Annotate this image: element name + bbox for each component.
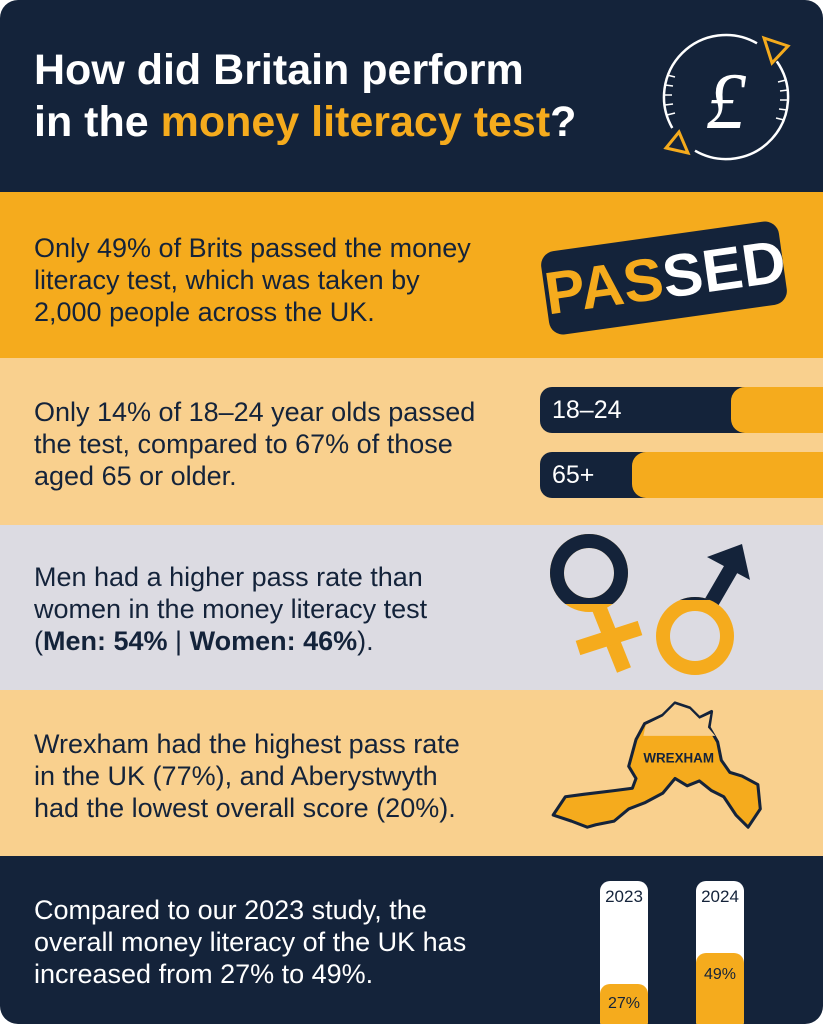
panel: age: [0, 358, 823, 525]
text: age comparison: Only 14% of 18–24 year olds passed: [34, 397, 475, 427]
icon: map: [552, 701, 762, 829]
text: Wrexham: in the UK (77%), and Aberystwyth: [34, 761, 438, 791]
chart: 2023 bar: [600, 881, 648, 1024]
text: Wrexham: had the lowest overall score (20%).: [34, 793, 456, 823]
icon: pound dial: [662, 34, 791, 160]
chart: 2024 bar: 49%: [704, 966, 736, 983]
title: in the money literacy test?: [34, 98, 576, 146]
bar: 18-24: 18–24: [552, 396, 622, 424]
text: comparison: Compared to our 2023 study, the: [34, 895, 427, 925]
chart: 2024 bar: 2024: [701, 887, 739, 906]
panel: year comparison: [0, 856, 823, 1024]
icon: PASSED stamp: PASSED: [540, 227, 790, 327]
bar: 65+: [540, 452, 823, 498]
text: age comparison: the test, compared to 67% of those: [34, 429, 453, 459]
text: age comparison: aged 65 or older.: [34, 461, 237, 491]
text: Wrexham: Wrexham had the highest pass rate: [34, 729, 460, 759]
text: comparison: [34, 895, 466, 989]
icon: gender symbols: [550, 534, 750, 675]
text: 49% passed: 2,000 people across the UK.: [34, 297, 375, 327]
text: comparison: increased from 27% to 49%.: [34, 959, 373, 989]
text: gender: Men had a higher pass rate than: [34, 562, 423, 592]
header panel: [0, 0, 823, 192]
text: 49% passed: [34, 233, 471, 327]
female cross: [598, 605, 624, 670]
text: comparison: overall money literacy of the UK has: [34, 927, 466, 957]
icon: map: WREXHAM: [643, 751, 714, 766]
chart: 2024 bar: [696, 881, 744, 1024]
icon: pound dial: £: [706, 58, 747, 146]
text: gender: (Men: 54% | Women: 46%).: [34, 626, 374, 656]
panel: regions: [0, 690, 823, 856]
male arrow: [710, 562, 735, 605]
text: 49% passed: Only 49% of Brits passed the money: [34, 233, 471, 263]
chart: 2023 bar: 2023: [605, 887, 643, 906]
text: gender: women in the money literacy test: [34, 594, 427, 624]
panel: gender: [0, 525, 823, 690]
text: age comparison: [34, 397, 475, 491]
title: [34, 46, 576, 146]
bar: 18-24: [540, 387, 823, 433]
title: How did Britain perform: [34, 46, 524, 94]
panel: passed: [0, 192, 823, 358]
text: 49% passed: literacy test, which was taken by: [34, 265, 420, 295]
chart: 2023 bar: 27%: [608, 995, 640, 1012]
text: Wrexham: [34, 729, 460, 823]
bar: 65+: 65+: [552, 461, 594, 489]
text: gender: [34, 562, 427, 656]
